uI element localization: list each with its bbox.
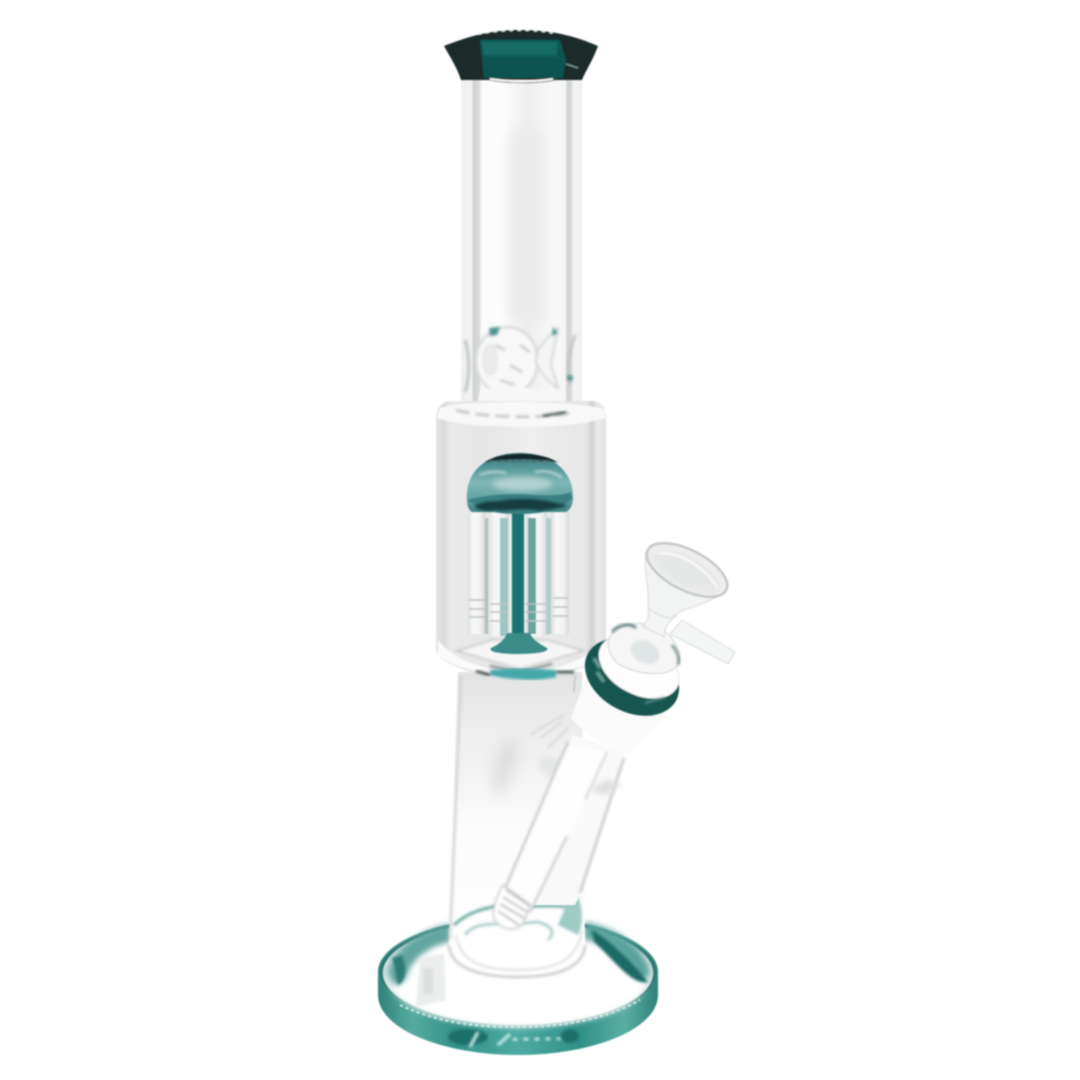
teal tinted inner arms bbox=[500, 518, 508, 636]
percolator dome bbox=[467, 453, 573, 514]
arm and down stem bbox=[494, 715, 625, 929]
arm grey reflection bbox=[590, 780, 622, 795]
inner floor teal arcs bbox=[454, 906, 578, 925]
bowl piece bbox=[608, 532, 735, 674]
bowl neck bbox=[642, 608, 676, 637]
central stem bbox=[512, 510, 524, 638]
white ground joint bbox=[571, 672, 668, 752]
price sticker bbox=[416, 953, 446, 1007]
right pinch wing bbox=[536, 328, 558, 388]
base top face bbox=[380, 918, 656, 1026]
joint to body seam sparkle bbox=[530, 715, 568, 748]
arm tubes bbox=[468, 512, 569, 636]
bowl handle bbox=[670, 620, 735, 664]
stem coil tip bbox=[494, 885, 531, 929]
frosted male joint bbox=[588, 623, 690, 711]
large pinch lens bbox=[476, 327, 538, 395]
band dark patches and sparkle bbox=[400, 1000, 640, 1047]
green joint ring bbox=[571, 623, 693, 731]
down stem tube bbox=[497, 745, 609, 913]
ice pinch bbox=[465, 327, 575, 402]
side wall distortions bbox=[465, 335, 575, 392]
lower tube bbox=[449, 672, 585, 978]
base left teal reflection bbox=[388, 924, 450, 985]
inner teal patch bbox=[558, 886, 582, 935]
tube foot ring bbox=[449, 945, 585, 977]
base rim band bbox=[378, 917, 658, 1055]
perc chamber bbox=[436, 401, 606, 680]
tube edge lines bbox=[450, 676, 461, 940]
dome underside bbox=[468, 492, 572, 514]
upper neck tube bbox=[461, 78, 582, 403]
lip teal inset bbox=[480, 40, 566, 78]
grey ghost reflections bbox=[493, 739, 520, 798]
base disc bbox=[378, 917, 658, 1055]
chamber shoulder bbox=[437, 402, 605, 427]
stem foot bbox=[491, 633, 547, 654]
arm tube bbox=[530, 735, 625, 905]
base right teal reflection bbox=[585, 922, 650, 980]
tree percolator arms bbox=[468, 512, 570, 636]
bottom joint teal reflection bbox=[476, 668, 574, 680]
dome dark crown bbox=[484, 454, 558, 463]
bowl cup bbox=[608, 623, 680, 674]
arm slit marks bbox=[469, 598, 568, 621]
chamber floor bbox=[438, 640, 604, 675]
bowl rim bbox=[639, 532, 735, 608]
mouthpiece lip bbox=[444, 30, 598, 83]
teal glints bbox=[489, 327, 558, 336]
bowl funnel bbox=[645, 552, 726, 618]
dome highlights bbox=[492, 477, 552, 491]
